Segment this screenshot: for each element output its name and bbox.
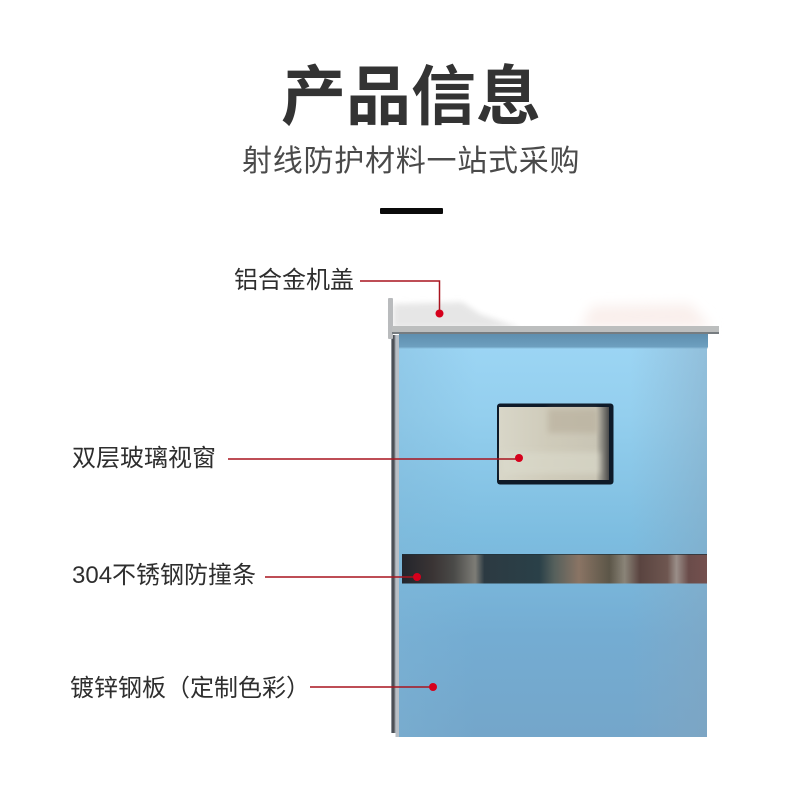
leader: strip <box>265 573 421 581</box>
door side frame <box>391 335 399 737</box>
label: galvanized panel: 镀锌钢板（定制色彩） <box>70 675 310 702</box>
machine cover top surface <box>393 302 712 328</box>
leader: aluminium cover <box>360 281 444 318</box>
title divider <box>380 208 443 214</box>
stainless steel strip <box>402 554 707 584</box>
viewing window <box>497 404 614 484</box>
subtitle: 射线防护材料一站式采购 <box>242 145 580 178</box>
leader: window <box>228 454 523 462</box>
leader: panel <box>310 683 437 691</box>
cover end post <box>388 298 393 339</box>
label: 304 strip: 304不锈钢防撞条 <box>72 562 256 589</box>
machine cover bar <box>392 326 719 334</box>
door panel <box>399 334 707 737</box>
top shadow <box>399 334 708 349</box>
title: 产品信息 <box>281 60 541 133</box>
label: aluminium cover: 铝合金机盖 <box>234 267 354 294</box>
label: double glass window: 双层玻璃视窗 <box>72 445 216 472</box>
